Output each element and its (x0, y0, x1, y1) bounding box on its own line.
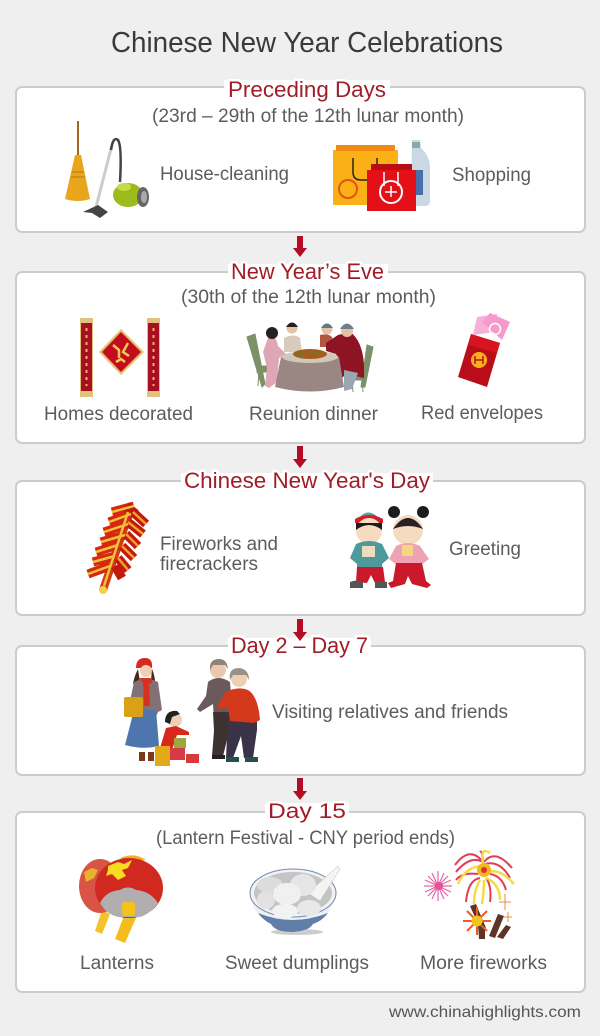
title: Chinese New Year Celebrations (111, 27, 503, 59)
subtitle: lantern festival: (Lantern Festival - CNY period ends) (156, 828, 455, 849)
label: lanterns: Lanterns (80, 953, 154, 974)
icon: family at reunion dinner (247, 322, 373, 392)
panel: day 2 to day 7 (16, 633, 585, 775)
heading: day 15: Day 15 (268, 800, 346, 823)
icon: broom and vacuum cleaner (65, 121, 149, 218)
label: greeting: Greeting (449, 539, 521, 560)
icon: couplets and diamond decoration (80, 318, 160, 397)
label: more fireworks: More fireworks (420, 953, 547, 974)
arrow (293, 236, 307, 257)
date: new year's eve: (30th of the 12th lunar month) (181, 287, 436, 308)
label: fireworks and firecrackers: Fireworks and (160, 534, 278, 555)
icon: sweet dumplings in bowl (250, 866, 340, 935)
date range: preceding days: (23rd – 29th of the 12th lunar month) (152, 106, 464, 127)
icon: red lanterns (79, 855, 163, 943)
heading: new year's eve: New Year’s Eve (231, 259, 384, 284)
label: visiting relatives and friends: Visiting relatives and friends (272, 702, 508, 723)
label: red envelopes: Red envelopes (421, 403, 543, 424)
icon: boy and girl greeting (350, 506, 431, 588)
icon: red envelope with money (458, 313, 510, 387)
label: fireworks and firecrackers (160, 534, 278, 575)
icon: family visiting relatives (124, 658, 260, 766)
icon: firecrackers (88, 506, 146, 594)
arrow: overlapping day 2 heading (293, 619, 307, 641)
heading: chinese new year's day: Chinese New Year's Day (184, 468, 430, 493)
label: sweet dumplings: Sweet dumplings (225, 953, 369, 974)
source url: www.chinahighlights.com (388, 1004, 581, 1021)
label: house-cleaning: House-cleaning (160, 164, 289, 185)
heading: day 2 to day 7: Day 2 – Day 7 (231, 633, 368, 658)
icon: fireworks (424, 851, 514, 939)
arrow (293, 778, 307, 800)
panel: day 15 (16, 800, 585, 992)
heading: preceding days: Preceding Days (228, 77, 386, 102)
panel: preceding days (16, 77, 585, 232)
icon: shopping bags and bottle (333, 140, 430, 211)
panel: chinese new year's day (16, 468, 585, 615)
label: homes decorated: Homes decorated (44, 404, 193, 425)
label: shopping: Shopping (452, 165, 531, 186)
panel: new year's eve (16, 259, 585, 443)
label: fireworks and firecrackers: firecrackers (160, 554, 258, 575)
label: reunion dinner: Reunion dinner (249, 404, 379, 425)
arrow (293, 446, 307, 468)
